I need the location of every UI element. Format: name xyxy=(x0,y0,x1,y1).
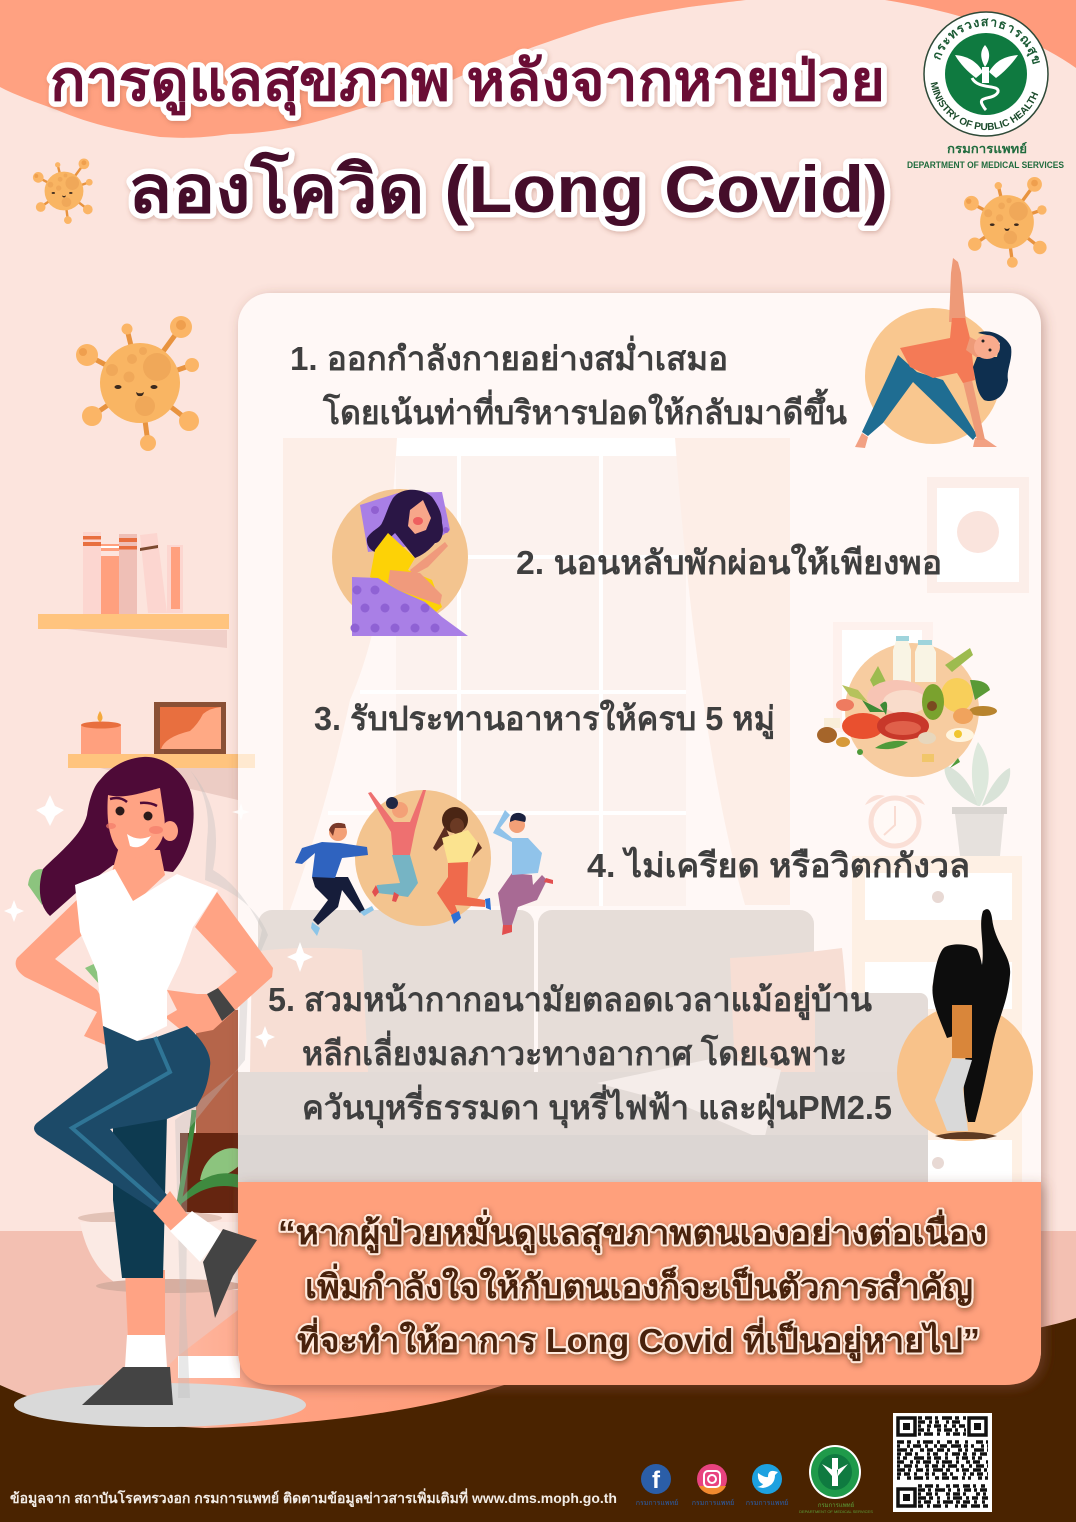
raised foot xyxy=(153,1191,190,1235)
room cabinet and plant behind woman xyxy=(28,869,248,1213)
raised leg xyxy=(34,1026,210,1211)
hair xyxy=(40,757,194,916)
logo: footer department: DEPARTMENT OF MEDICAL SERVICES xyxy=(799,1509,873,1514)
icon: twitter xyxy=(746,1464,788,1507)
clock xyxy=(871,798,919,846)
rear frame xyxy=(833,622,933,732)
floor ellipse under woman xyxy=(14,1383,306,1427)
icon: facebook: f xyxy=(652,1467,661,1494)
header salmon shape left xyxy=(0,0,746,138)
text block: item 3: 3. รับประทานอาหารให้ครบ 5 หมู่ xyxy=(314,699,775,740)
cabinet xyxy=(852,856,1022,1182)
text block: quote: “หากผู้ป่วยหมั่นดูแลสุขภาพตนเองอย่างต่อเนื่อง xyxy=(278,1209,987,1254)
brown ground xyxy=(0,1318,1076,1522)
text block: quote: เพิ่มกำลังใจให้กับตนเองก็จะเป็นตัวการสำคัญ xyxy=(305,1263,973,1306)
sofa arm right xyxy=(815,993,928,1143)
watch xyxy=(207,988,235,1021)
icon: virus large left xyxy=(76,316,199,451)
sparkles xyxy=(4,795,313,1048)
icon: instagram: กรมการแพทย์ xyxy=(692,1499,734,1507)
icon: cigarette and smoke xyxy=(897,909,1033,1141)
text block: item 5: หลีกเลี่ยงมลภาวะทางอากาศ โดยเฉพาะ xyxy=(302,1030,847,1072)
title line 1: การดูแลสุขภาพ หลังจากหายป่วย xyxy=(50,49,885,116)
footer text: ข้อมูลจาก สถาบันโรคทรวงอก กรมการแพทย์ ติดตามข้อมูลข่าวสารเพิ่มเติมที่ www.dms.moph.go.th xyxy=(10,1488,617,1507)
standing sock xyxy=(125,1335,167,1367)
text block: quote: ที่จะทำให้อาการ Long Covid ที่เป็นอยู่หายไป” xyxy=(297,1317,980,1362)
icon: food five groups xyxy=(817,636,997,777)
text block: item 1: โดยเน้นท่าที่บริหารปอดให้กลับมาดีขึ้น xyxy=(322,388,847,431)
icon: facebook: กรมการแพทย์ xyxy=(636,1499,678,1507)
text block: item 5 xyxy=(268,981,892,1129)
floor xyxy=(0,1231,1076,1522)
right arm xyxy=(165,892,273,1035)
text block: item 1: 1. ออกกำลังกายอย่างสม่ำเสมอ xyxy=(290,335,728,377)
standing leg trousers xyxy=(113,1115,167,1278)
ghost shadow xyxy=(175,770,268,1398)
icon: facebook xyxy=(636,1464,678,1507)
text block: item 4: 4. ไม่เครียด หรือวิตกกังวล xyxy=(587,846,970,884)
sofa cushions xyxy=(250,948,368,1072)
person 1 blue shirt xyxy=(295,823,374,936)
logo: footer department xyxy=(799,1445,873,1514)
candle and frame shelf xyxy=(68,702,255,800)
curtains xyxy=(283,438,397,910)
header salmon shape right xyxy=(885,0,1076,68)
logo: footer department: กรมการแพทย์ xyxy=(818,1501,854,1509)
neck xyxy=(112,850,165,905)
person 3 yellow shirt xyxy=(433,807,491,924)
icon: sleeping woman xyxy=(332,489,468,636)
standing leg skin xyxy=(125,1270,165,1340)
icon: dancing people xyxy=(295,790,553,936)
left arm xyxy=(16,892,108,1046)
sofa seat xyxy=(238,1072,928,1136)
window panes xyxy=(396,456,686,906)
room background scene xyxy=(238,438,1029,1182)
person 4 blue shirt xyxy=(493,810,553,935)
text block: quote xyxy=(278,1209,987,1362)
logo: Ministry of Public Health: กระทรวงสาธารณสุข xyxy=(934,18,1040,64)
plant xyxy=(944,765,978,806)
rug xyxy=(100,1310,530,1432)
woman illustration xyxy=(16,757,273,1405)
icon: virus top right xyxy=(964,177,1047,268)
panel: quote box xyxy=(238,1182,1041,1385)
text block: item 5: ควันบุหรี่ธรรมดา บุหรี่ไฟฟ้า และฝุ่นPM2.5 xyxy=(302,1084,892,1129)
panel: main recommendations card xyxy=(238,293,1041,1383)
shirt xyxy=(75,869,218,1041)
department name Thai: กรมการแพทย์ xyxy=(947,142,1027,156)
icon: yoga woman xyxy=(855,258,1011,448)
icon: instagram xyxy=(692,1464,734,1507)
department name English: DEPARTMENT OF MEDICAL SERVICES xyxy=(907,160,1064,170)
left book shelf xyxy=(38,532,229,648)
face details xyxy=(106,798,163,847)
sofa backs xyxy=(258,910,534,1110)
person 2 pink shirt xyxy=(368,790,426,902)
face xyxy=(107,788,165,858)
icon: virus top left xyxy=(33,158,93,224)
white round table xyxy=(78,1211,244,1378)
QR code xyxy=(893,1413,992,1512)
picture frame xyxy=(927,477,1029,593)
text block: item 1 xyxy=(290,335,847,431)
logo: Ministry of Public Health xyxy=(923,11,1049,137)
title line 2: ลองโควิด (Long Covid) xyxy=(128,150,888,226)
standing shoe xyxy=(82,1367,173,1405)
logo: Ministry of Public Health: MINISTRY OF PUBLIC HEALTH xyxy=(930,82,1038,130)
text block: item 2: 2. นอนหลับพักผ่อนให้เพียงพอ xyxy=(516,543,942,581)
text block: item 5: 5. สวมหน้ากากอนามัยตลอดเวลาแม้อยู่บ้าน xyxy=(268,981,872,1021)
icon: twitter: กรมการแพทย์ xyxy=(746,1499,788,1507)
